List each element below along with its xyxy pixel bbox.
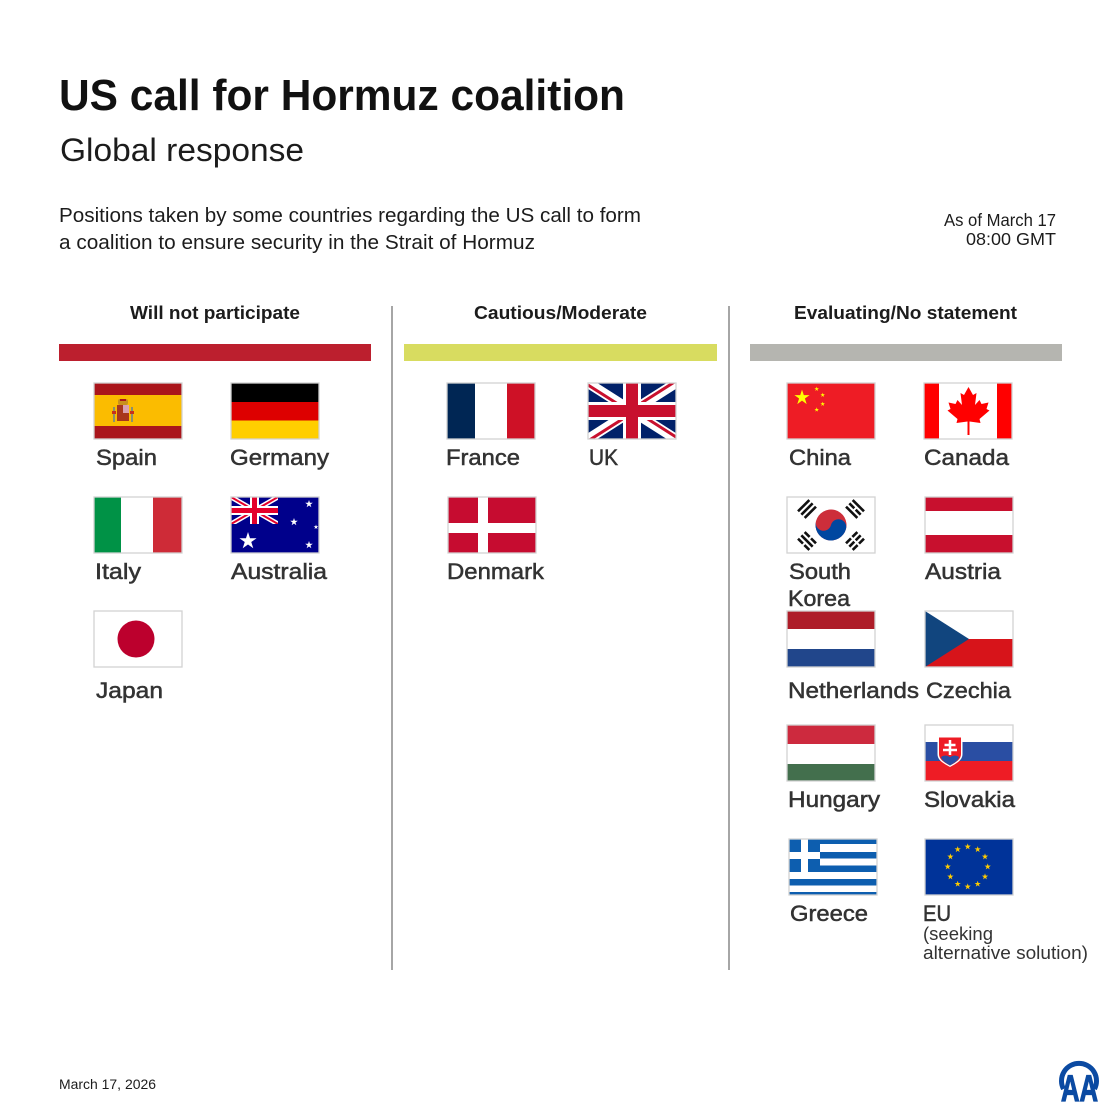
label: Australia: Australia bbox=[231, 559, 328, 584]
label: Austria: Austria bbox=[925, 559, 1002, 584]
description bbox=[59, 205, 641, 254]
heading: evaluating/no statement: Evaluating/No statement bbox=[794, 302, 1017, 323]
flag: Austria bbox=[925, 497, 1013, 553]
description: a coalition to ensure security in the Strait of Hormuz bbox=[59, 232, 535, 254]
label: Spain: Spain bbox=[96, 445, 157, 470]
subtitle: Global response bbox=[60, 132, 304, 168]
heading: will not participate: Will not participate bbox=[130, 302, 300, 323]
flag: Denmark bbox=[448, 497, 536, 553]
flag: China bbox=[787, 383, 875, 439]
title: US call for Hormuz coalition bbox=[59, 71, 625, 120]
label: China: China bbox=[789, 445, 852, 470]
label: EU: (seeking bbox=[923, 924, 993, 944]
label: EU: alternative solution) bbox=[923, 943, 1088, 963]
label: South Korea bbox=[788, 559, 851, 611]
label: Denmark: Denmark bbox=[447, 559, 545, 584]
flag: France bbox=[447, 383, 535, 439]
flag: Czechia bbox=[925, 611, 1013, 667]
label: South Korea: South bbox=[789, 559, 851, 584]
flag: Australia bbox=[231, 497, 319, 553]
timestamp note: 08:00 GMT bbox=[966, 229, 1056, 249]
label: Italy: Italy bbox=[95, 559, 141, 584]
logo: AA: AA bbox=[1061, 1068, 1098, 1109]
label: EU bbox=[923, 901, 1088, 963]
timestamp note bbox=[944, 210, 1056, 249]
label: Germany: Germany bbox=[230, 445, 329, 470]
flag: Greece bbox=[789, 839, 877, 895]
label: Canada: Canada bbox=[924, 445, 1010, 470]
label: Japan: Japan bbox=[96, 678, 163, 703]
flag: Netherlands bbox=[787, 611, 875, 667]
panel: cautious/moderate bbox=[404, 302, 717, 584]
flag: Japan bbox=[94, 611, 182, 667]
logo: AA bbox=[1061, 1063, 1098, 1109]
description: Positions taken by some countries regarding the US call to form bbox=[59, 205, 641, 227]
flag: Italy bbox=[94, 497, 182, 553]
panel: will not participate bbox=[59, 302, 371, 703]
flag: South Korea bbox=[787, 497, 875, 553]
label: Hungary: Hungary bbox=[788, 787, 880, 812]
label: Greece: Greece bbox=[790, 901, 868, 926]
label: Czechia: Czechia bbox=[926, 678, 1012, 703]
flag: UK bbox=[588, 381, 676, 441]
flag: Hungary bbox=[787, 725, 875, 781]
timestamp note: As of March 17 bbox=[944, 210, 1056, 230]
panel: evaluating/no statement bbox=[750, 302, 1088, 963]
flag: Canada bbox=[924, 383, 1012, 439]
date: March 17, 2026 bbox=[59, 1077, 156, 1092]
label: Netherlands: Netherlands bbox=[788, 678, 919, 703]
label: UK: UK bbox=[589, 445, 618, 470]
flag: Spain bbox=[94, 383, 182, 439]
label: EU: EU bbox=[923, 901, 951, 926]
flag: Slovakia bbox=[925, 725, 1013, 781]
heading: cautious/moderate: Cautious/Moderate bbox=[474, 302, 647, 323]
flag: EU bbox=[925, 839, 1013, 895]
label: Slovakia: Slovakia bbox=[924, 787, 1016, 812]
label: France: France bbox=[446, 445, 520, 470]
label: South Korea: Korea bbox=[788, 586, 851, 611]
category bar: yellow-green bbox=[404, 344, 717, 361]
flag: Germany bbox=[231, 383, 319, 439]
category bar: grey bbox=[750, 344, 1062, 361]
category bar: red bbox=[59, 344, 371, 361]
